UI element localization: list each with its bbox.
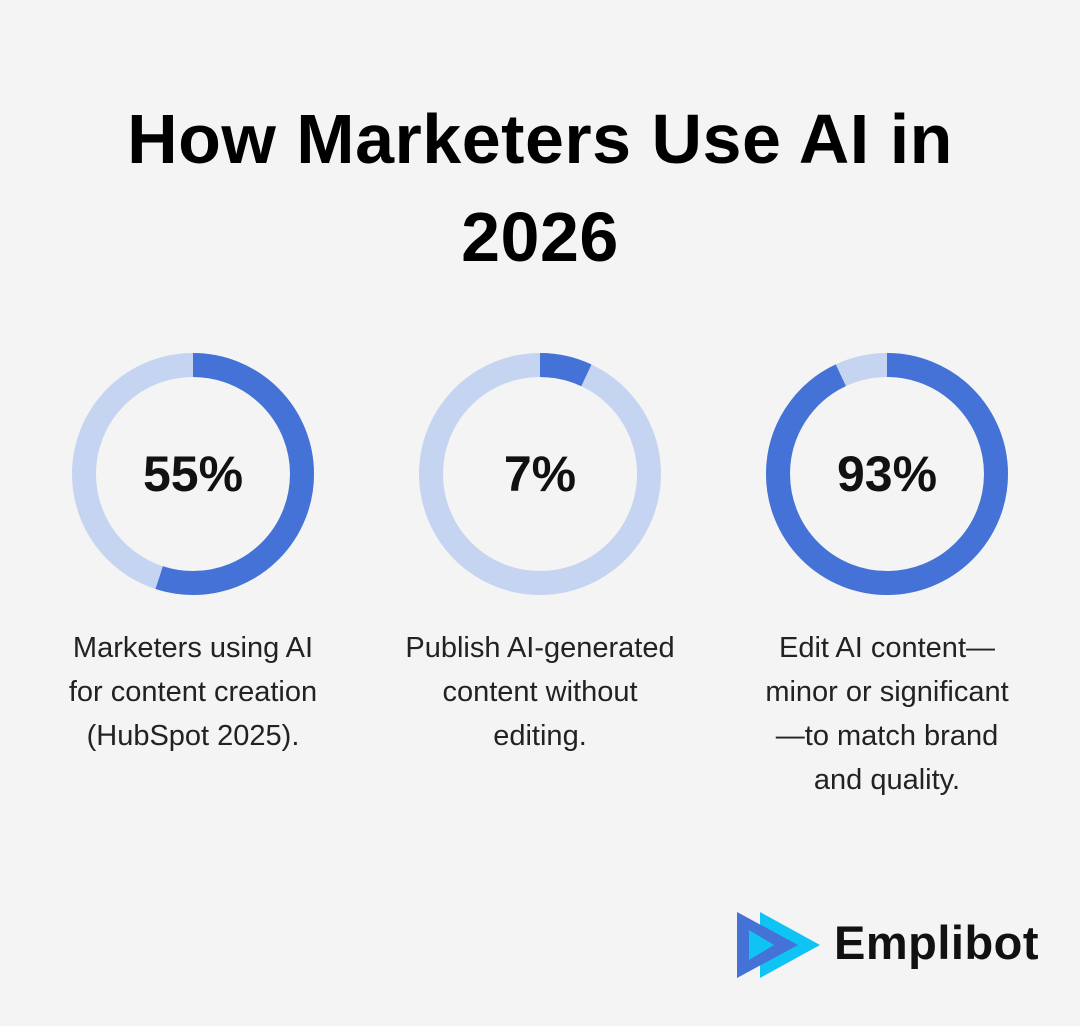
label: 55%: Marketers using AI [73,632,313,664]
logo: Emplibot: Emplibot [834,916,1039,969]
label: 7%: editing. [493,720,587,752]
donut: 93%: 93% [837,446,937,502]
label: 7%: Publish AI-generated [405,632,675,664]
label: 93%: —to match brand [776,720,998,752]
title: How Marketers Use AI in [127,100,953,178]
title [127,100,953,276]
label: 93%: minor or significant [765,676,1009,708]
label: 7% [405,632,675,752]
label: 55% [69,632,317,752]
donut: 55%: 55% [143,446,243,502]
label: 93% [765,632,1009,796]
title: 2026 [461,198,619,276]
logo: Emplibot [737,912,1039,978]
label: 93%: and quality. [814,764,960,796]
label: 7%: content without [442,676,638,708]
label: 93%: Edit AI content— [779,632,995,664]
label: 55%: (HubSpot 2025). [87,720,299,752]
donut: 93% [766,353,1008,595]
donut: 7% [419,353,661,595]
donut: 55% [72,353,314,595]
donut: 7%: 7% [504,446,576,502]
label: 55%: for content creation [69,676,317,708]
